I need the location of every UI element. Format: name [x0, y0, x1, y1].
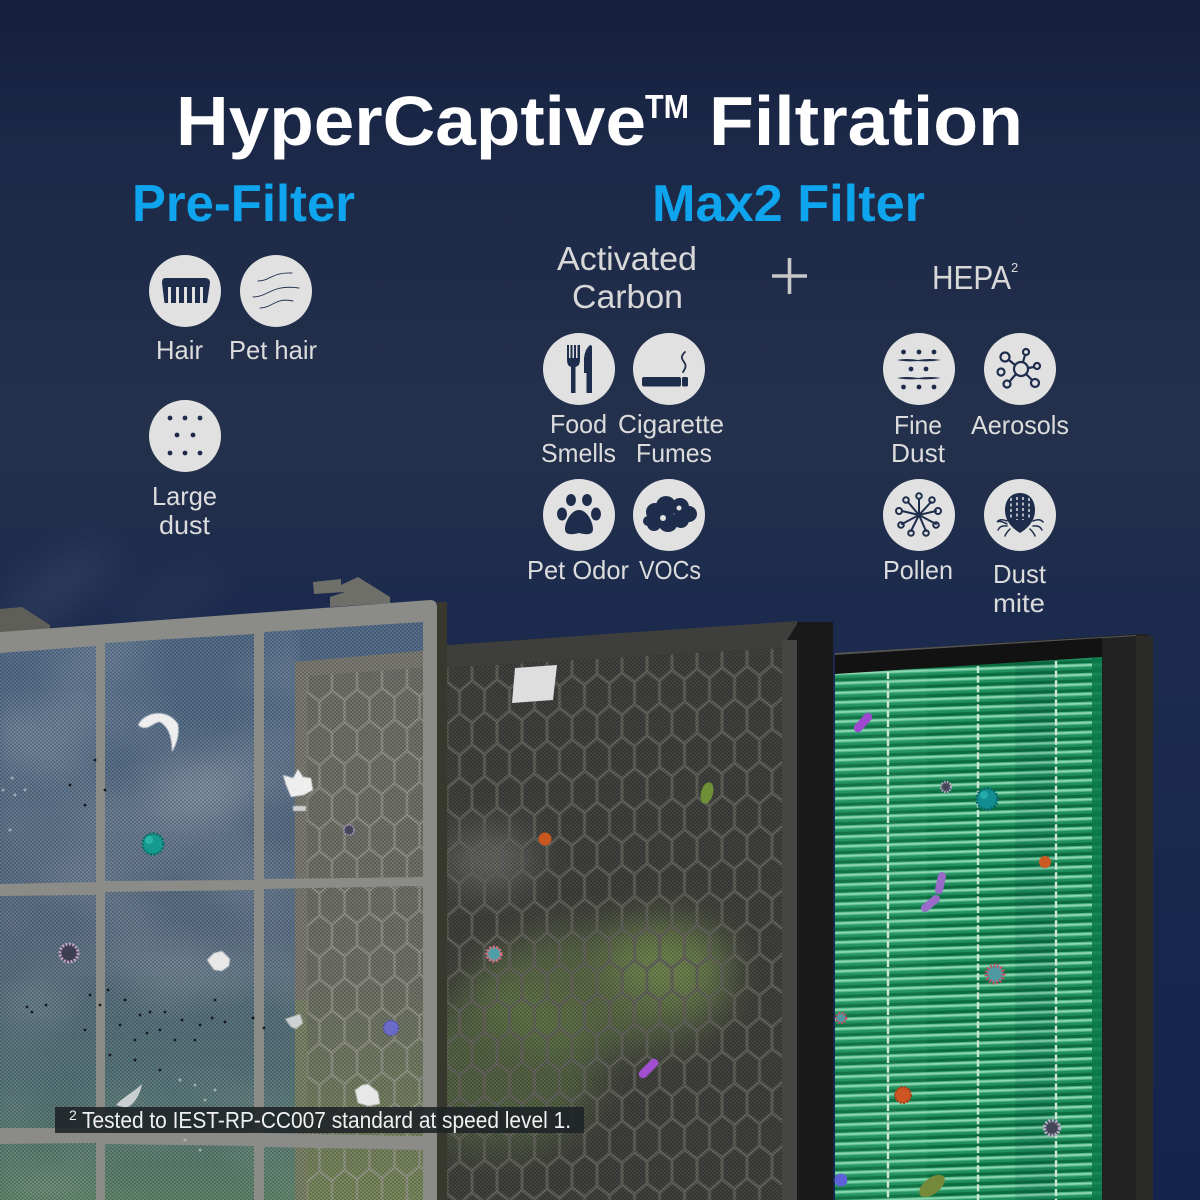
- item: VOCs: VOCs: [639, 555, 701, 585]
- particle: small purple spore: [344, 825, 354, 835]
- item: Pollen: Pollen: [883, 555, 953, 585]
- item: VOCs: [633, 479, 705, 585]
- heading: Max2 Filter: Max2 Filter: [652, 175, 925, 233]
- particle: blue spore on HEPA: [834, 1174, 848, 1186]
- particle: feather: [138, 713, 179, 752]
- particle: purple capsule on HEPA: [858, 717, 868, 728]
- particle: coronavirus on carbon: [487, 947, 501, 961]
- item: Aerosols: Aerosols: [971, 410, 1069, 440]
- title: TM: [645, 88, 689, 125]
- item: Pet Odor: [527, 479, 629, 585]
- smoke wisps: [0, 530, 231, 650]
- item: Fine Dust: Fine: [894, 410, 942, 440]
- title: [176, 82, 1023, 160]
- heading: HEPA squared: HEPA: [932, 259, 1011, 296]
- title: HyperCaptive: [176, 82, 646, 160]
- item: Cigarette Fumes: Cigarette: [618, 409, 724, 439]
- item: Food Smells: [541, 333, 616, 468]
- particle: purple capsule on carbon: [643, 1063, 654, 1074]
- particle: orange spore on HEPA: [1039, 856, 1051, 868]
- dust specks on mesh: [27, 760, 264, 1070]
- particle: olive pollen: [698, 781, 716, 805]
- item: Dust mite: [984, 479, 1056, 618]
- item: Cigarette Fumes: Fumes: [636, 438, 712, 468]
- particle: blue spore: [384, 1020, 398, 1036]
- item: Pet hair: [229, 255, 317, 365]
- item: Pet hair: Pet hair: [229, 335, 317, 365]
- title: Filtration: [709, 82, 1023, 160]
- particle: orange virus: [895, 1087, 911, 1103]
- white label on carbon filter: [512, 665, 557, 703]
- heading: Activated Carbon: Carbon: [572, 278, 683, 315]
- item: Dust mite: Dust: [993, 559, 1047, 589]
- particle: purple double capsule: [925, 876, 942, 908]
- particle: white puffs: [207, 951, 303, 1029]
- particle: orange spore: [538, 832, 552, 846]
- item: Fine Dust: [883, 333, 955, 468]
- item: Dust mite: mite: [993, 588, 1045, 618]
- item: Food Smells: Smells: [541, 438, 616, 468]
- particle: grey spore on HEPA: [941, 782, 951, 792]
- Activated carbon filter panel: [447, 621, 833, 1200]
- item: Hair: Hair: [156, 335, 203, 365]
- particle: feather lower: [116, 1084, 142, 1108]
- heading: Pre-Filter: Pre-Filter: [132, 175, 355, 233]
- item: Large dust: Large: [152, 481, 217, 511]
- item: Aerosols: [971, 333, 1069, 440]
- HEPA filter panel: [835, 634, 1153, 1200]
- item: Food Smells: Food: [550, 409, 607, 439]
- item: Cigarette Fumes: [618, 333, 724, 468]
- particle: white flakes: [283, 769, 313, 811]
- particle: white flake lower: [355, 1084, 380, 1106]
- footnote: Tested to IEST-RP-CC007 standard at speed level 1.: [82, 1107, 571, 1133]
- particle: teal virus: [142, 834, 164, 854]
- heading: Activated Carbon: [557, 240, 697, 315]
- heading: Activated Carbon: Activated: [557, 240, 697, 277]
- particle: purple spore: [60, 944, 78, 962]
- particle: olive pollen on HEPA: [915, 1170, 949, 1200]
- item: Fine Dust: Dust: [891, 438, 946, 468]
- item: Large dust: [149, 400, 221, 540]
- particle: coronavirus on HEPA: [986, 966, 1004, 982]
- item: Pet Odor: Pet Odor: [527, 555, 629, 585]
- plus sign: [772, 258, 807, 294]
- particle: small coronavirus edge: [836, 1013, 846, 1023]
- heading: HEPA squared: 2: [1011, 260, 1018, 275]
- footnote: 2: [69, 1107, 77, 1123]
- particle: grey virus: [1044, 1120, 1060, 1136]
- clip hook right: [313, 577, 390, 607]
- Pre-filter frame: [0, 577, 447, 1200]
- item: Large dust: dust: [159, 510, 211, 540]
- Pre-filter mesh panes: [0, 620, 430, 1200]
- item: Pollen: [883, 479, 955, 585]
- item: Hair: [149, 255, 221, 365]
- particle: teal virus on HEPA: [976, 788, 998, 810]
